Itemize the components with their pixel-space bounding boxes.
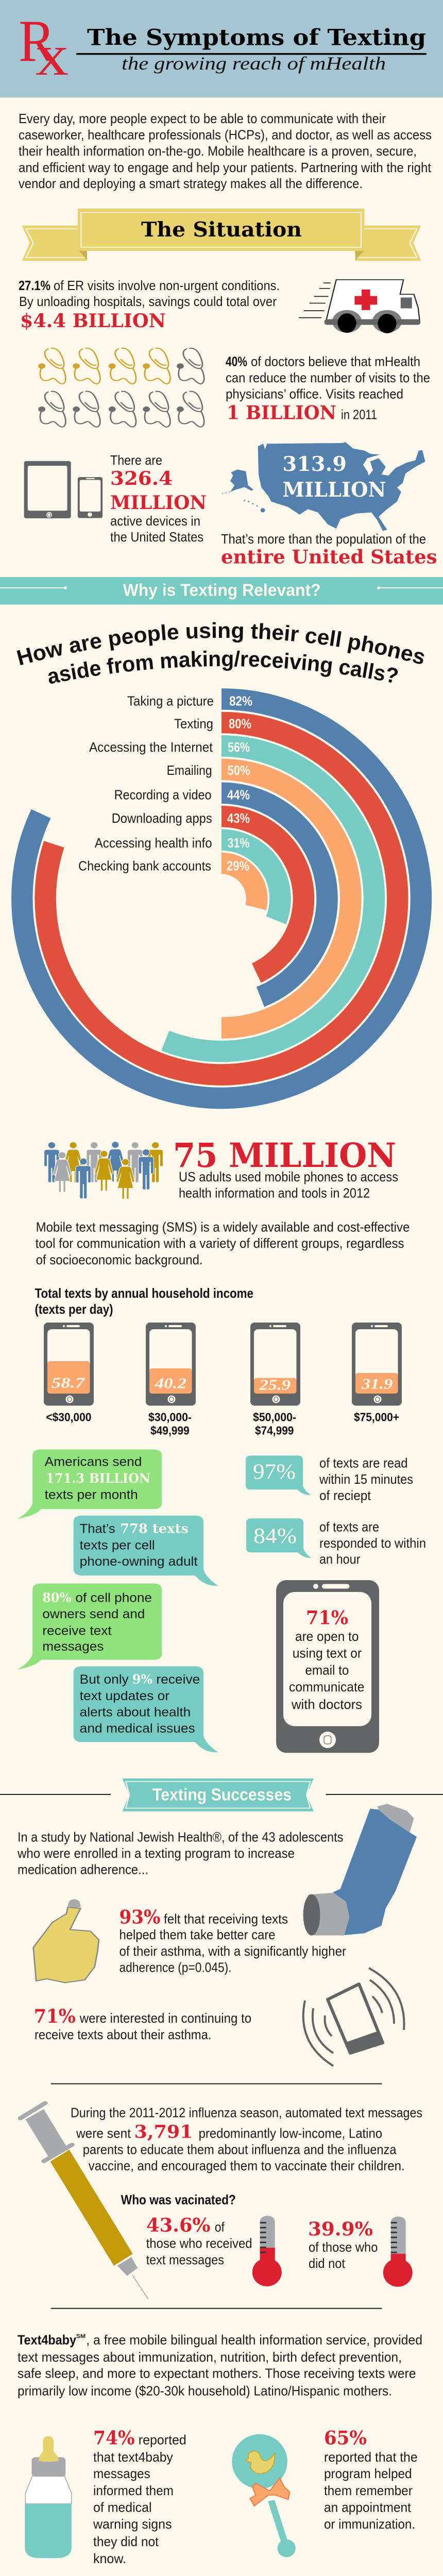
text block: influenza season: predominantly low-income, Latino: [199, 2125, 382, 2141]
phone: 75000 plus: [352, 1323, 402, 1405]
heading: Texting Successes banner: Texting Successes: [152, 1785, 292, 1804]
chart labels: Checking bank accounts: [78, 858, 211, 874]
text block: doctors: 40%: [226, 353, 247, 369]
phone: under 30000: 58.7: [52, 1376, 85, 1391]
text block: 74 percent: [93, 2428, 186, 2566]
text block: intro: [19, 111, 432, 191]
stat: 39.9 percent: did not: [309, 2256, 346, 2271]
speech bubble: 9 percent: and medical issues: [80, 1721, 195, 1736]
callout: 84 percent: 84%: [253, 1524, 297, 1548]
icon: thumbs up: [33, 1899, 99, 1982]
stat: 39.9 percent: of those who: [309, 2239, 378, 2255]
text block: 71 percent continuing: [34, 2006, 251, 2042]
text block: 74 percent: warning signs: [93, 2516, 172, 2532]
text block: active devices: 326.4: [110, 468, 173, 489]
chart labels: [78, 693, 214, 874]
income labels: <$30,000: [46, 1411, 91, 1424]
heading: Texting Successes banner: [0, 1778, 443, 1811]
speech bubble: 778 texts: texts per cell: [80, 1538, 155, 1552]
callout: 97 percent: of texts are read: [319, 1455, 408, 1470]
callout: 84 percent: [246, 1518, 426, 1567]
icon: US map with population: 313.9: [282, 452, 347, 476]
chart values: 56%: [228, 739, 250, 755]
heading: The Situation banner: [22, 209, 421, 261]
speech bubble: 778 texts: phone-owning adult: [80, 1554, 198, 1569]
text block: SMS description: Mobile text messaging (SMS) is a widely available and cost-effective: [36, 1219, 410, 1234]
text block: ER visits savings: of ER visits involve non-urgent conditions.: [54, 278, 280, 293]
text block: 71 percent continuing: receive texts about their asthma.: [35, 2027, 211, 2042]
income labels: $74,999: [255, 1423, 294, 1437]
phone: 50000 to 74999: 25.9: [259, 1378, 291, 1394]
text block: 65 percent: an appointment: [324, 2500, 412, 2515]
icon: Rx symbol: [19, 8, 69, 88]
text block: 71 percent continuing: 71%: [34, 2006, 76, 2027]
icon: stethoscope grid: [39, 348, 204, 427]
text block: Text4baby: , a free mobile bilingual health information service, provided: [86, 2332, 422, 2347]
speech bubble: 9 percent: But only: [80, 1672, 129, 1687]
text block: 75 million: health information and tools in 2012: [179, 1185, 370, 1200]
icon: crowd of people: [44, 1142, 163, 1199]
text block: influenza season: 3,791: [134, 2121, 193, 2142]
icon: tablet and phone: [24, 461, 103, 518]
icon: thermometer one: [252, 2216, 282, 2286]
heading: Why is Texting Relevant band: Why is Texting Relevant?: [123, 581, 321, 600]
text block: 74 percent: reported: [139, 2432, 186, 2448]
text block: ER visits savings: By unloading hospitals, savings could total over: [19, 294, 277, 309]
text block: 74 percent: 74%: [93, 2428, 135, 2449]
text block: entire United States: [221, 531, 437, 568]
heading: texts by income: [35, 1285, 253, 1317]
icon: thermometer two: [383, 2216, 413, 2287]
icon: ambulance: [299, 280, 420, 333]
text block: intro: vendor and deploying a smart strategy makes all the difference.: [19, 176, 363, 191]
divider line top: [51, 2083, 382, 2084]
phone: 30000 to 49999: 40.2: [154, 1376, 186, 1392]
text block: ER visits savings: 27.1%: [19, 278, 50, 293]
icon: syringe: [20, 2103, 148, 2299]
income labels: $30,000-: [148, 1411, 192, 1424]
text block: ER visits savings: $4.4 BILLION: [20, 310, 166, 332]
speech bubble: 80 percent: owners send and: [42, 1607, 145, 1621]
icon: US map with population: [222, 442, 425, 531]
text block: 71 percent continuing: were interested in continuing to: [79, 2010, 251, 2026]
text block: ER visits savings: [19, 278, 280, 332]
phone: 75000 plus: 31.9: [361, 1377, 393, 1393]
callout: 97 percent: 97%: [253, 1461, 296, 1484]
chart labels: Accessing the Internet: [89, 739, 213, 755]
text block: National Jewish Health study: [17, 1829, 343, 1877]
chart: phones filled by income: [44, 1323, 402, 1437]
icon: large phone with 71 percent: communicate: [289, 1679, 365, 1694]
heading: The Situation banner: The Situation: [141, 218, 302, 242]
text block: active devices: MILLION: [110, 492, 207, 514]
stat: 43.6 percent: 43.6%: [146, 2215, 210, 2236]
text block: Text4baby: Text4baby: [18, 2332, 76, 2347]
text block: 74 percent: that text4baby: [93, 2449, 173, 2465]
stat: 43.6 percent: [146, 2215, 252, 2267]
icon: US map with population: MILLION: [282, 478, 386, 502]
heading: curved question: aside from making/receiving calls?: [48, 650, 398, 684]
text block: doctors: of doctors believe that mHealth: [251, 353, 420, 369]
text block: active devices: the United States: [110, 529, 203, 545]
callout: 97 percent: within 15 minutes: [319, 1471, 413, 1487]
text block: doctors: can reduce the number of visits to the: [226, 370, 430, 385]
icon: large phone with 71 percent: email to: [305, 1662, 349, 1677]
speech bubble: 171.3 billion: Americans send: [45, 1454, 142, 1469]
icon: large phone with 71 percent: 71%: [306, 1607, 348, 1629]
text block: doctors: [226, 353, 430, 424]
callout: 97 percent: of reciept: [319, 1488, 371, 1503]
text block: influenza season: were sent: [76, 2125, 131, 2141]
text block: doctors: in 2011: [341, 407, 377, 422]
icon: vibrating phone: [303, 1968, 404, 2066]
income labels: $50,000-: [253, 1411, 296, 1424]
text block: active devices: [110, 452, 207, 545]
chart labels: Taking a picture: [127, 693, 214, 709]
speech bubble: 171.3 billion: [17, 1449, 162, 1519]
text block: active devices: There are: [110, 452, 162, 468]
speech bubble: 80 percent: messages: [42, 1639, 104, 1654]
text block: SMS description: of socioeconomic background.: [36, 1252, 203, 1267]
chart values: 80%: [229, 716, 251, 731]
icon: large phone with 71 percent: using text or: [293, 1646, 362, 1661]
chart labels: Texting: [174, 716, 213, 731]
text block: 74 percent: of medical: [93, 2500, 151, 2515]
callout: 84 percent: responded to within: [319, 1535, 426, 1551]
text block: 93 percent: adherence (p=0.045).: [120, 1959, 232, 1975]
icon: large phone with 71 percent: are open to: [295, 1629, 359, 1644]
text block: Text4baby: safe sleep, and more to expectant mothers. Those receiving texts were: [18, 2365, 416, 2381]
callout: 84 percent: of texts are: [319, 1519, 379, 1534]
chart values: 50%: [228, 762, 250, 778]
text block: Text4baby: SM: [76, 2333, 86, 2340]
title: The Symptoms of Texting: [87, 25, 426, 50]
callout: 97 percent: [246, 1455, 413, 1503]
text block: 93 percent: of their asthma, with a significantly higher: [120, 1943, 346, 1959]
speech bubble: 9 percent: alerts about health: [80, 1705, 191, 1720]
chart values: 43%: [227, 810, 250, 826]
text block: 93 percent: helped them take better care: [120, 1927, 275, 1942]
speech bubble: 778 texts: That’s: [80, 1522, 115, 1536]
text block: 75 million: 75 MILLION: [173, 1136, 396, 1175]
text block: 74 percent: know.: [93, 2551, 126, 2566]
text block: 65 percent: them remember: [324, 2483, 413, 2498]
text block: 75 million: [173, 1136, 398, 1200]
chart values: 44%: [227, 787, 250, 803]
text block: entire United States: entire United States: [221, 546, 437, 568]
speech bubble: 80 percent: receive text: [42, 1623, 112, 1638]
text block: influenza season: [71, 2105, 422, 2173]
speech bubble: 80 percent: of cell phone: [75, 1590, 152, 1605]
text block: 65 percent: [324, 2428, 418, 2532]
chart labels: Recording a video: [114, 787, 212, 803]
text block: 65 percent: reported that the: [324, 2449, 418, 2465]
speech bubble: 9 percent: [74, 1666, 218, 1752]
text block: 65 percent: program helped: [324, 2466, 412, 2481]
speech bubble: 9 percent: text updates or: [80, 1689, 169, 1703]
chart labels: Emailing: [167, 762, 212, 778]
text block: National Jewish Health study: medication adherence...: [18, 1862, 148, 1877]
speech bubble: 80 percent: 80%: [42, 1590, 72, 1605]
heading: curved question: How are people using their cell phones: [16, 622, 424, 666]
text block: active devices: active devices in: [110, 513, 200, 529]
heading: texts by income: Total texts by annual household income: [35, 1285, 253, 1301]
speech bubble: 778 texts: 778 texts: [120, 1521, 189, 1536]
icon: inhaler: [303, 1804, 417, 1936]
chart values: 82%: [229, 693, 252, 709]
heading: texts by income: (texts per day): [35, 1301, 113, 1317]
speech bubble: 171.3 billion: texts per month: [45, 1487, 138, 1502]
divider line bottom: [51, 2308, 382, 2309]
text block: intro: Every day, more people expect to be able to communicate with their: [19, 111, 386, 126]
subtitle: the growing reach of mHealth: [122, 53, 386, 74]
text block: 74 percent: informed them: [93, 2483, 174, 2498]
speech bubble: 171.3 billion: 171.3 BILLION: [46, 1471, 150, 1486]
text block: 75 million: US adults used mobile phones to access: [179, 1169, 398, 1184]
text block: SMS description: tool for communication with a variety of different groups, regardless: [36, 1235, 404, 1251]
chart labels: Downloading apps: [112, 810, 212, 826]
stat: 43.6 percent: text messages: [146, 2252, 224, 2267]
phone: 30000 to 49999: [146, 1323, 196, 1405]
phone: 50000 to 74999: [250, 1323, 300, 1405]
speech bubble: 9 percent: receive: [156, 1672, 200, 1687]
stat: 43.6 percent: of: [215, 2219, 225, 2235]
icon: large phone with 71 percent: with doctors: [291, 1697, 362, 1712]
phone: under 30000: [44, 1323, 94, 1405]
text block: 93 percent: felt that receiving texts: [164, 1911, 288, 1927]
chart labels: Accessing health info: [95, 835, 212, 851]
text block: intro: their health information on-the-go. Mobile healthcare is a proven, secure,: [19, 143, 417, 159]
income labels: [46, 1411, 399, 1437]
text block: 93 percent: [120, 1906, 346, 1975]
speech bubble: 778 texts: [74, 1516, 218, 1586]
text block: Text4baby: primarily low income ($20-30k household) Latino/Hispanic mothers.: [18, 2383, 392, 2399]
chart values: 29%: [227, 858, 249, 874]
speech bubble: 80 percent: [17, 1584, 162, 1670]
icon: baby bottle: [25, 2436, 72, 2558]
text block: influenza season: vaccine, and encouraged them to vaccinate their children.: [89, 2158, 405, 2173]
text block: Text4baby: text messages about immunization, nutrition, birth defect prevention,: [18, 2349, 402, 2365]
icon: Rx symbol: R: [19, 8, 55, 74]
text block: 74 percent: they did not: [93, 2534, 159, 2549]
speech bubble: 9 percent: 9%: [132, 1672, 152, 1687]
income labels: $75,000+: [354, 1411, 399, 1424]
heading: who was vaccinated: Who was vacinated?: [121, 2192, 236, 2208]
icon: Rx symbol: x: [36, 23, 69, 88]
text block: doctors: 1 BILLION: [227, 402, 336, 424]
text block: entire United States: That’s more than the population of the: [221, 531, 426, 547]
text block: 65 percent: 65%: [324, 2428, 367, 2449]
text block: influenza season: parents to educate them about influenza and the influenza: [83, 2142, 397, 2157]
text block: National Jewish Health study: who were enrolled in a texting program to increase: [17, 1845, 295, 1861]
stat: 39.9 percent: 39.9%: [308, 2218, 373, 2240]
stat: 43.6 percent: those who received: [146, 2235, 252, 2251]
text block: SMS description: [36, 1219, 410, 1267]
icon: large phone with 71 percent: [276, 1580, 379, 1753]
text block: National Jewish Health study: In a study by National Jewish Health®, of the 43 adolescents: [18, 1829, 343, 1844]
icon: baby rattle: [232, 2434, 296, 2557]
heading: Why is Texting Relevant band: [0, 577, 443, 605]
income labels: $49,999: [150, 1423, 190, 1437]
callout: 84 percent: an hour: [319, 1551, 361, 1567]
chart values: [227, 693, 252, 874]
stat: 39.9 percent: [308, 2218, 378, 2271]
text block: doctors: physicians’ office. Visits reached: [226, 386, 403, 402]
panel: header: [0, 0, 443, 97]
chart values: 31%: [228, 835, 249, 851]
text block: Text4baby: [18, 2332, 422, 2399]
text block: 93 percent: 93%: [120, 1906, 161, 1928]
text block: 65 percent: or immunization.: [324, 2516, 415, 2532]
chart: radial bar chart of cell phone activities: [22, 693, 421, 1098]
text block: 74 percent: messages: [93, 2466, 150, 2481]
